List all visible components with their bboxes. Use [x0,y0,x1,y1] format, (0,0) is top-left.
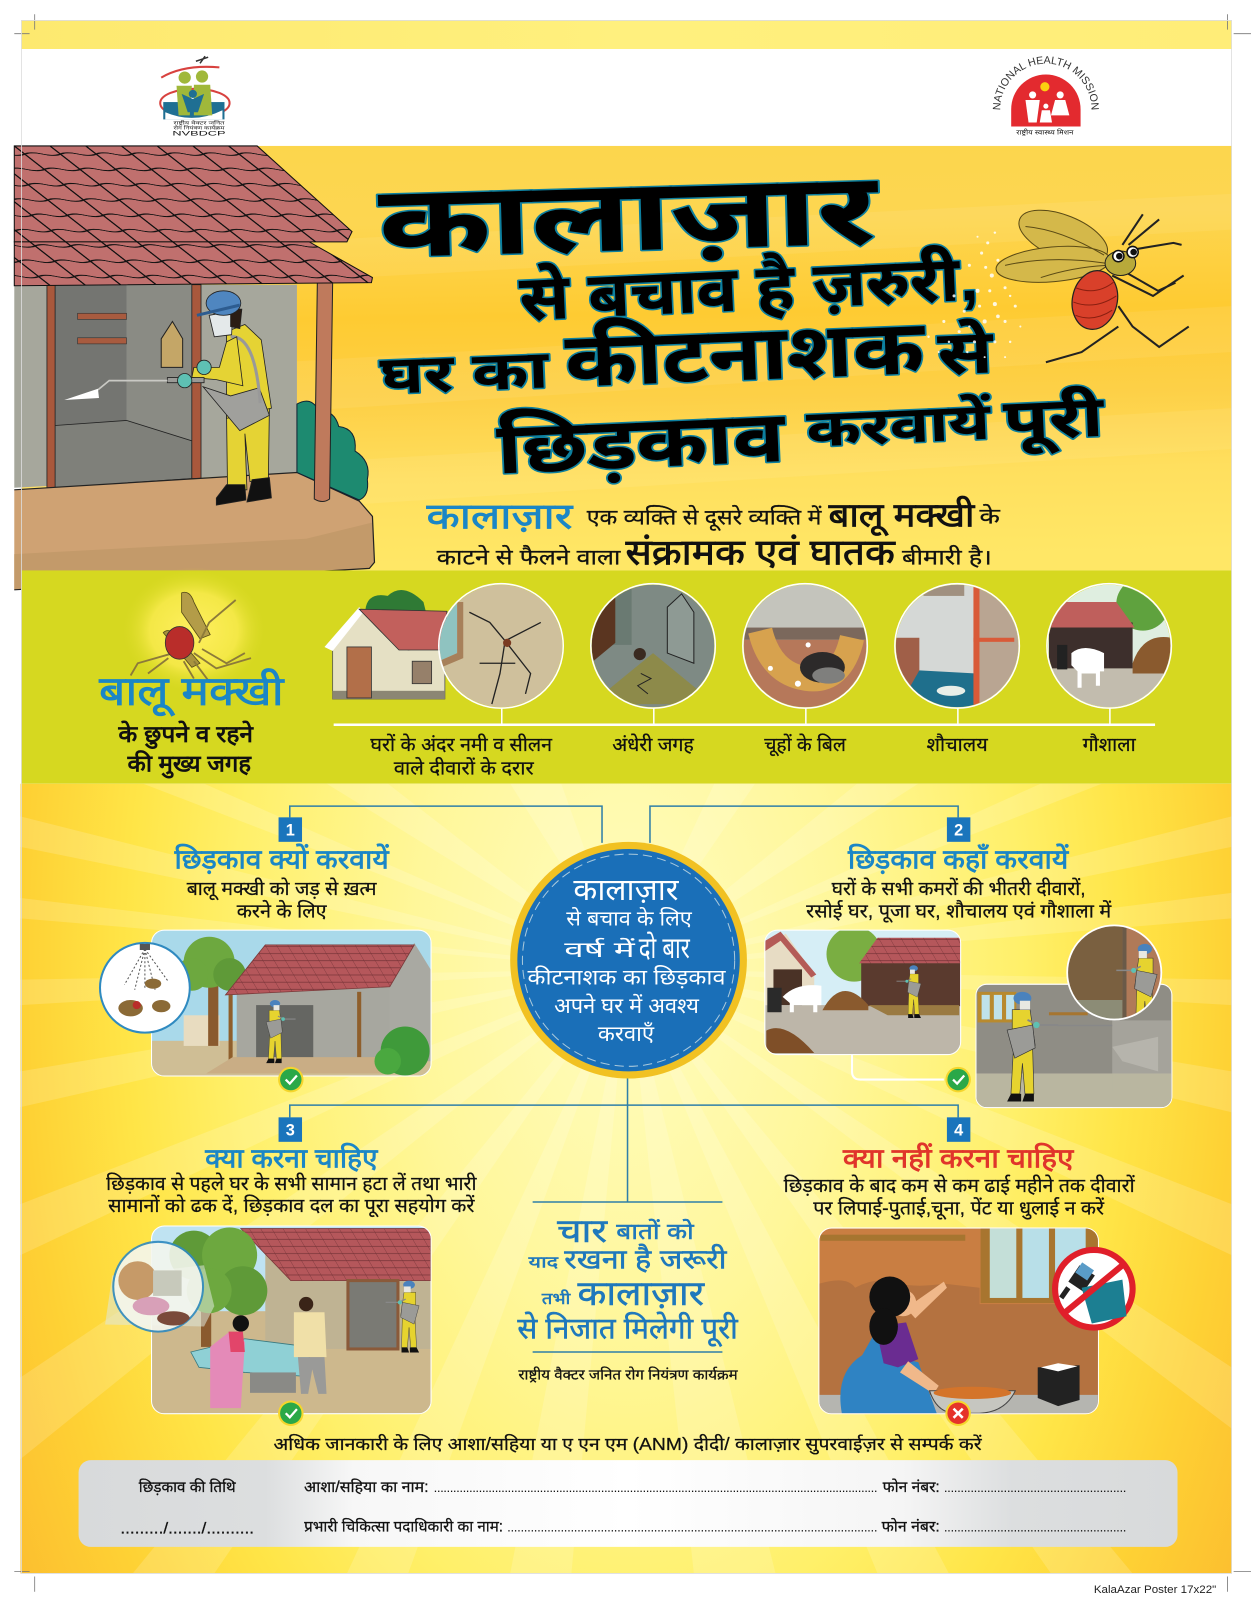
picture: indoor spraying [975,984,1172,1108]
central reminder text: तभी [542,1290,571,1308]
intro paragraph: के [980,504,1001,528]
title line 2: से बचाव है ज़रुरी, [518,243,980,334]
connector to badge [852,1054,944,1080]
inset: wall spraying close up [1066,924,1162,1032]
lower panel background with sun rays [20,784,1232,1573]
wings [995,199,1115,287]
white logo strip [21,49,1232,146]
panel: form fields: .......................................................................................................................................... [434,1480,878,1495]
logo: NVBDCP: रोग नियंत्रण कार्यक्रम [173,125,226,132]
circle: cowshed [1047,578,1171,709]
intro paragraph: कालाज़ार [427,497,574,537]
text 3: छिड़काव से पहले घर के सभी सामान हटा लें तथा भारी [106,1172,477,1195]
title line 3 [378,302,996,410]
central reminder text: याद [529,1253,559,1271]
habitat labels: अंधेरी जगह [612,733,695,756]
check badge 3 [278,1400,304,1426]
worker [167,291,271,505]
legs [1046,214,1189,362]
number badge 3: 3 [286,1122,295,1140]
top yellow band [21,20,1232,49]
title line 4: छिड़काव [495,396,788,489]
central reminder text: कालाज़ार [578,1275,705,1313]
text 3 [106,1172,477,1218]
central blue circle: अपने घर में अवश्य [554,993,700,1018]
section 4 [784,1117,1136,1426]
head [1105,251,1136,276]
subheading line 1: के छुपने व रहने [118,720,254,749]
central reminder text: रखना है जरूरी [564,1243,727,1274]
picture: woman plastering wall [818,1228,1099,1414]
intro paragraph: एक व्यक्ति से दूसरे व्यक्ति में [587,504,823,531]
icon: sandfly [131,592,251,682]
small village house [324,590,447,699]
habitat labels: चूहों के बिल [764,733,847,757]
habitat labels: गौशाला [1083,734,1137,756]
habitat labels: शौचालय [927,734,989,756]
title line 4 [495,382,1107,489]
wall [14,285,297,488]
panel: form fields: प्रभारी चिकित्सा पदाधिकारी का नाम: [304,1518,503,1536]
text 2: रसोई घर, पूजा घर, शौचालय एवं गौशाला में [806,899,1112,923]
text 2 [806,877,1112,923]
title line 3: घर का [379,340,551,406]
logo: National Health Mission: राष्ट्रीय स्वास्थ्य मिशन [1016,129,1074,137]
picture: house being sprayed [100,930,432,1077]
number badge 3 [279,1117,302,1142]
text 1: करने के लिए [237,899,327,922]
check badge 1 [278,1067,304,1092]
intro paragraph: बालू मक्खी [829,497,976,536]
panel: form fields: फोन नंबर: [882,1518,940,1536]
inset: covered utensils [105,1242,214,1332]
print slug: KalaAzar Poster 17x22" [1094,1584,1216,1596]
central blue circle: करवाएँ [598,1022,655,1046]
subheading line 2: की मुख्य जगह [128,749,252,778]
central reminder text [517,1212,739,1384]
logo: NVBDCP: NVBDCP [172,131,227,138]
text 2: घरों के सभी कमरों की भीतरी दीवारों, [832,877,1086,900]
circle: dark corner [591,584,715,708]
text 4 [784,1174,1136,1220]
number badge 4 [947,1117,970,1142]
picture: covering belongings [105,1225,432,1414]
sandfly glow [120,567,267,694]
door posts [47,285,201,489]
text 4: छिड़काव के बाद कम से कम ढाई महीने तक दीवारों [784,1174,1136,1197]
heading 1: छिड़काव क्यों करवायें [174,843,390,874]
habitat timeline [334,708,1155,726]
central reminder text: बातों को [616,1218,695,1244]
habitat labels: घरों के अंदर नमी व सीलन [370,733,553,756]
logo: National Health Mission: NATIONAL HEALTH MISSION [992,56,1099,110]
inset: spray on sandflies [100,943,190,1033]
picture: cowshed [764,927,961,1055]
check badge 2 [945,1067,971,1092]
illustration: fleeing mosquito [927,199,1189,362]
title [377,153,1107,489]
heading: sandfly: बालू मक्खी [99,668,285,716]
text 1: बालू मक्खी को जड़ से ख़त्म [187,877,377,901]
logo: National Health Mission [992,56,1099,137]
room interior [55,285,192,488]
title line 3: से [936,317,996,387]
icon: no painting sign [1055,1250,1133,1328]
panel: sandfly habitats [21,567,1232,784]
intro paragraph: बीमारी है। [902,544,992,569]
title line 3: कीटनाशक [564,305,927,403]
panel: form fields: फोन नंबर: [883,1478,940,1496]
habitat labels [370,733,1137,779]
wooden pillar [314,283,333,502]
eyes [1113,246,1138,262]
central blue circle: दो बार [639,931,690,965]
contact line: अधिक जानकारी के लिए आशा/सहिया या ए एन एम (ANM) दीदी/ कालाज़ार सुपरवाईज़र से सम्पर्क करें [273,1433,983,1456]
number badge 2: 2 [954,822,963,840]
intro paragraph: काटने से फैलने वाला [437,544,621,569]
text 1 [187,877,377,922]
spray wand [64,381,167,400]
central blue circle [510,842,747,1079]
circle: toilet [895,584,1020,711]
title line 1: कालाज़ार [377,153,881,279]
panel: form fields: ........./......./.......... [120,1521,254,1538]
heading 2: छिड़काव कहाँ करवायें [848,843,1069,874]
central reminder text: से निजात मिलेगी पूरी [517,1311,739,1348]
heading 4: क्या नहीं करना चाहिए [843,1142,1074,1173]
number badge 2 [947,817,970,842]
panel: form fields [79,1460,1178,1547]
text 4: पर लिपाई-पुताई,चूना, पेंट या धुलाई न करें [813,1196,1105,1220]
habitat labels: वाले दीवारों के दरार [394,756,535,779]
logo: NVBDCP [160,56,230,138]
central blue circle: वर्ष में [564,937,637,962]
number badge 1: 1 [286,822,295,840]
panel: form fields: ....................................................... [944,1480,1126,1495]
platform [14,472,374,590]
panel: form fields: छिड़काव की तिथि [139,1478,236,1496]
number badge 1 [279,817,302,842]
circle: wall cracks [439,584,563,708]
bush [297,401,368,500]
circle: rat burrow [743,584,867,708]
section 1 [100,817,432,1092]
illustration: house with spray worker [14,146,374,590]
logo: NVBDCP: राष्ट्रीय वेक्टर जनित [173,120,225,127]
panel: form fields: ....................................................... [944,1520,1126,1535]
title line 4: करवायें [805,393,993,458]
intro paragraph [427,497,1001,572]
connector lines [290,806,958,1352]
text 3: सामानों को ढक दें, छिड़काव दल का पूरा सहयोग करें [108,1194,476,1218]
panel: form fields: आशा/सहिया का नाम: [304,1478,429,1496]
cross badge 4 [945,1400,971,1426]
section 2 [764,817,1172,1108]
central blue circle: कीटनाशक का छिड़काव [528,965,727,990]
central reminder text: राष्ट्रीय वैक्टर जनित रोग नियंत्रण कार्यक्रम [518,1367,738,1384]
number badge 4: 4 [954,1122,963,1140]
upper roof [14,146,352,242]
insecticide particles [927,231,1021,358]
abdomen [1067,266,1123,334]
lower roof [14,242,372,286]
hero panel background [21,146,1232,570]
intro paragraph: संक्रामक एवं घातक [625,532,895,572]
section 3 [105,1117,477,1426]
title line 4: पूरी [1002,384,1106,457]
central reminder text: चार [557,1212,608,1249]
heading 3: क्या करना चाहिए [205,1142,378,1173]
panel: form fields: ............................................................................................................... [507,1520,878,1535]
central blue circle: से बचाव के लिए [566,907,693,931]
central blue circle: कालाज़ार [573,873,679,907]
